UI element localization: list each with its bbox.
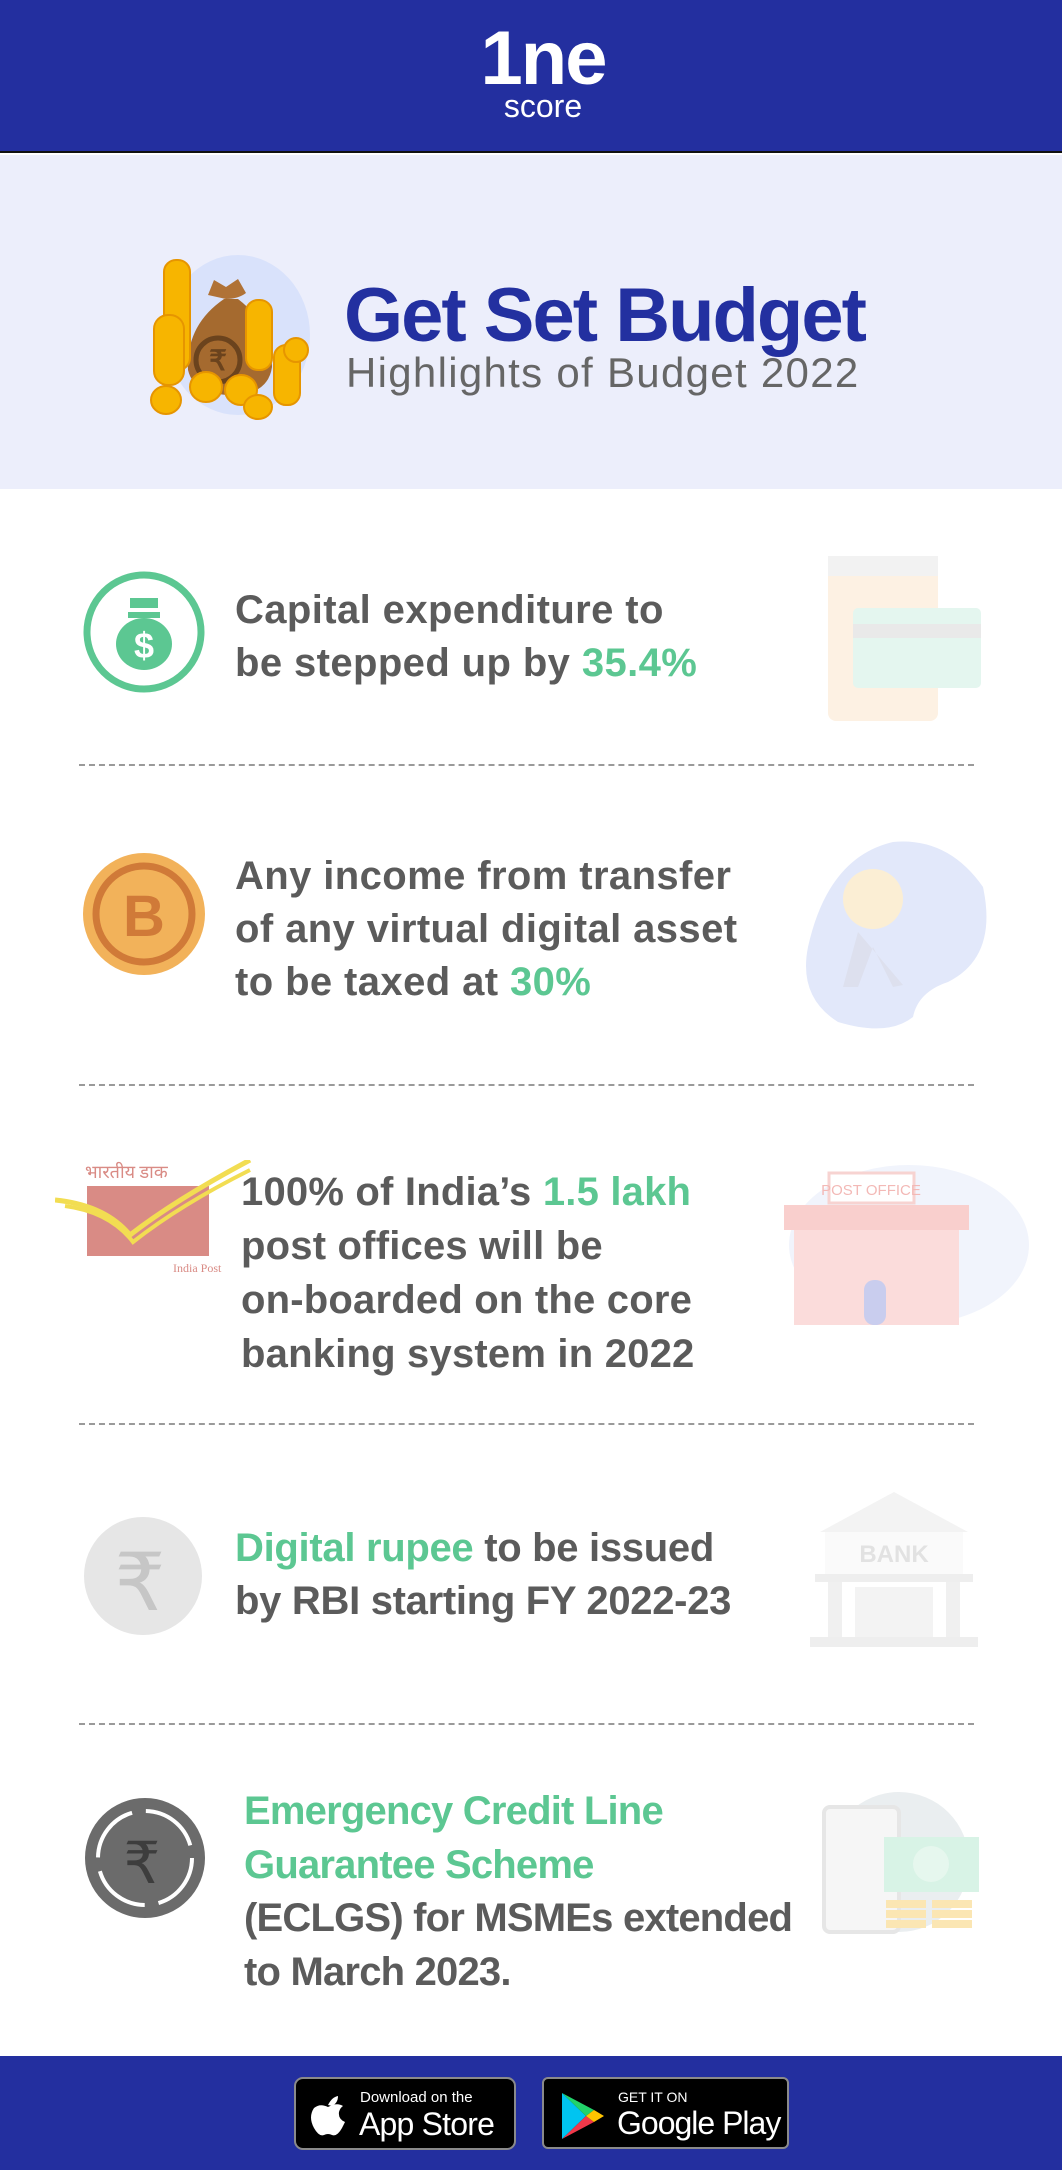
button: App Store: Download on the [360, 2089, 473, 2106]
text block [235, 1526, 731, 1623]
panel: digital rupee [84, 1492, 978, 1647]
icon: India Post logo: India Post [173, 1261, 222, 1275]
logo: 1ne [481, 16, 605, 101]
text block: be stepped up by 35.4% [235, 641, 697, 685]
text block: by RBI starting FY 2022-23 [235, 1579, 731, 1623]
text block: Guarantee Scheme [244, 1842, 594, 1886]
text block [235, 854, 737, 1004]
icon: money bag with coins: ₹ [209, 345, 227, 376]
text block: to March 2023. [244, 1950, 511, 1994]
text block: Any income from transfer [235, 854, 731, 898]
footer bar [0, 2056, 1062, 2170]
text block: post offices will be [241, 1224, 603, 1268]
icon: green money bag circle: $ [134, 625, 154, 666]
button: Google Play: Google Play [617, 2105, 780, 2141]
text block: Emergency Credit Line [244, 1789, 663, 1833]
text block: (ECLGS) for MSMEs extended [244, 1896, 792, 1940]
text block: of any virtual digital asset [235, 907, 737, 951]
icon: bitcoin coin: B [123, 884, 165, 949]
title: Get Set Budget [344, 273, 865, 358]
button: App Store: App Store [359, 2106, 494, 2142]
hero band [0, 155, 1062, 489]
illustration: phone with money [822, 1792, 979, 1934]
icon: dark rupee coin [85, 1798, 205, 1918]
illustration: bank: BANK [859, 1541, 929, 1568]
icon: grey rupee circle [84, 1517, 202, 1635]
illustration: blob with coin person [806, 842, 986, 1028]
button: Google Play: GET IT ON [618, 2089, 688, 2105]
subtitle: Highlights of Budget 2022 [346, 349, 860, 396]
icon: grey rupee circle: ₹ [115, 1538, 165, 1627]
text block [244, 1789, 792, 1994]
panel: capital expenditure [84, 556, 981, 721]
illustration: post office [784, 1165, 1029, 1325]
panel: India Post [55, 1160, 1029, 1376]
text block: 100% of India’s 1.5 lakh [241, 1170, 691, 1214]
illustration: phone and card [828, 556, 981, 721]
button: Google Play [542, 2077, 789, 2149]
illustration: post office: POST OFFICE [821, 1182, 921, 1199]
text block [241, 1170, 694, 1376]
illustration: bank [810, 1492, 978, 1647]
icon: dark rupee coin: ₹ [124, 1831, 160, 1896]
text block: Digital rupee to be issued [235, 1526, 714, 1570]
header bar [0, 0, 1062, 153]
text block: Capital expenditure to [235, 588, 664, 632]
icon: India Post logo: भारतीय डाक [85, 1161, 169, 1182]
text block: banking system in 2022 [241, 1332, 694, 1376]
text block: to be taxed at 30% [235, 960, 591, 1004]
icon: bitcoin coin [83, 853, 205, 975]
panel: virtual digital asset [83, 842, 986, 1028]
text block [235, 588, 697, 685]
button: App Store [294, 2077, 516, 2150]
icon: India Post logo [55, 1160, 252, 1275]
icon: green money bag circle [84, 572, 204, 692]
text block: on-boarded on the core [241, 1278, 692, 1322]
icon: money bag with coins [150, 255, 310, 420]
logo: score [504, 88, 582, 124]
panel: ECLGS [85, 1789, 979, 1994]
